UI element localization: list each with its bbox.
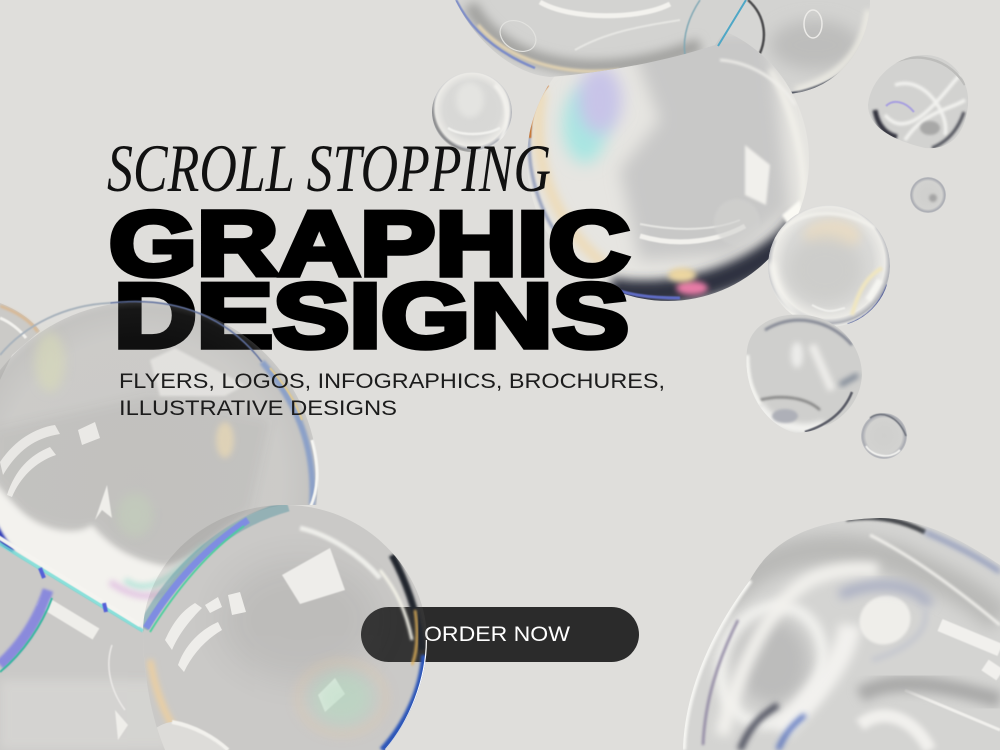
bubble: right lower xyxy=(746,314,862,432)
bubble: large left xyxy=(0,302,318,658)
rainbow edge xyxy=(143,506,288,628)
bubble: small top centre xyxy=(432,72,512,152)
seam: rainbow between bubbles xyxy=(0,535,143,631)
services text: ILLUSTRATIVE DESIGNS xyxy=(119,397,397,420)
bubble: right medium xyxy=(768,205,890,327)
services text: FLYERS, LOGOS, INFOGRAPHICS, BROCHURES, xyxy=(119,370,665,393)
bubble: bottom right blob xyxy=(680,510,1000,750)
bubble: blob top right xyxy=(868,55,968,148)
heading: graphic designs xyxy=(109,194,630,367)
bubble: top right xyxy=(724,0,870,94)
bubble: central large xyxy=(527,36,808,301)
heading: graphic designs: GRAPHIC xyxy=(109,194,630,295)
bubble: large lower xyxy=(140,500,430,750)
order now button xyxy=(361,607,639,662)
bubble: bottom left xyxy=(0,540,170,750)
seam: top bubbles xyxy=(718,0,746,46)
heading: scroll stopping: SCROLL STOPPING xyxy=(107,130,551,206)
window reflections xyxy=(282,548,345,604)
order now button: ORDER NOW xyxy=(424,623,570,646)
bubble: left edge small xyxy=(0,303,40,380)
bubble: tiny right xyxy=(910,177,946,213)
bubble: top centre xyxy=(455,0,718,77)
bubble: small lower right xyxy=(861,413,907,459)
gray reflection xyxy=(4,405,258,556)
heading: graphic designs: DESIGNS xyxy=(114,266,629,367)
services text xyxy=(119,370,665,420)
